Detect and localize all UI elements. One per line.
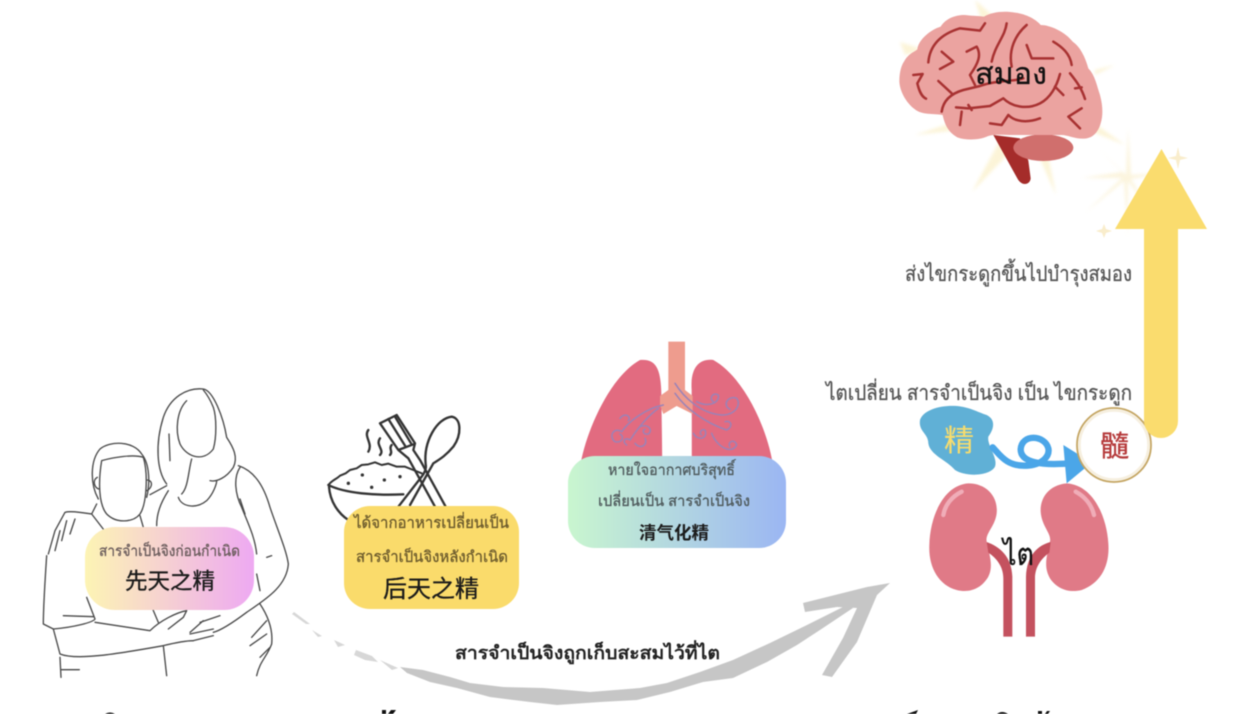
text: brain label: สมอง (975, 58, 1047, 91)
arrow: blue looped arrow (993, 438, 1092, 483)
text: post-birth essence caption line 1: ได้จากอาหารเปลี่ยนเป็น (352, 512, 509, 532)
text: kidney label: ไต (1000, 537, 1034, 572)
icon: sparkles near yellow arrow (1082, 128, 1172, 236)
icon: sparkles around brain (900, 0, 1125, 195)
icon: blue essence blob (920, 406, 996, 475)
panel: pre-birth essence (85, 527, 254, 610)
arrow: yellow upward arrow (1115, 149, 1207, 438)
text: marrow nourishes brain caption: ส่งไขกระดูกขึ้นไปบำรุงสมอง (905, 259, 1132, 287)
icon: kidneys (929, 483, 1109, 637)
text: pre-birth essence caption: สารจำเป็นจิงก่อนกำเนิด (99, 541, 240, 560)
icon: marrow circle (1077, 408, 1151, 482)
text: marrow character: 髓 (1100, 430, 1129, 463)
text: jing character: 精 (944, 425, 974, 458)
arrow: grey brush swoosh to kidneys (292, 583, 890, 705)
icon: small sparkles near arrow (1096, 147, 1188, 238)
illustration: parents embracing (43, 389, 288, 677)
text: post-birth essence caption line 2: สารจำเป็นจิงหลังกำเนิด (356, 547, 508, 566)
icon: brain (899, 12, 1102, 184)
text: clipped bottom caption marks (105, 710, 1050, 714)
text: pre-birth essence Chinese term: 先天之精 (125, 569, 215, 594)
panel: post-birth essence (344, 506, 519, 609)
text: essence stored in kidneys: สารจำเป็นจิงถูกเก็บสะสมไว้ที่ไต (455, 640, 720, 665)
icon: rice bowl with fork and spoon (328, 415, 459, 520)
text: breathing Chinese term: 清气化精 (639, 523, 709, 543)
text: breathing caption line 2: เปลี่ยนเป็น สารจำเป็นจิง (598, 490, 750, 510)
text: post-birth essence Chinese term: 后天之精 (383, 576, 479, 603)
icon: lungs with breath (581, 342, 773, 463)
panel: breathing essence (568, 456, 786, 548)
text: kidney transforms essence to marrow: ไตเปลี่ยน สารจำเป็นจิง เป็น ไขกระดูก (824, 378, 1132, 406)
text: breathing caption line 1: หายใจอากาศบริสุทธิ์ (608, 459, 737, 480)
